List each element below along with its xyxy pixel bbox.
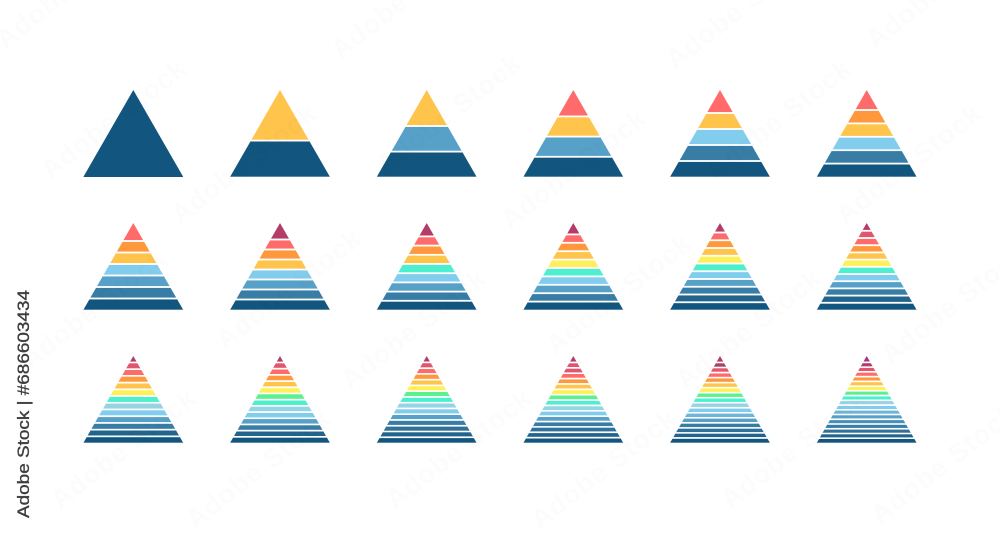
pyramid: 14 levels [230, 356, 330, 443]
pyramid: 11 levels [670, 223, 770, 310]
pyramid: 12 levels [817, 223, 917, 310]
pyramid: 1 level [83, 89, 183, 177]
row 1: pyramids with 1 to 6 levels [83, 89, 917, 177]
pyramid: 16 levels [523, 356, 623, 443]
pyramid: 3 levels [377, 90, 477, 177]
pyramid: 6 levels [817, 90, 917, 177]
pyramid: 7 levels [83, 223, 183, 310]
pyramid: 2 levels [230, 90, 330, 177]
row 2: pyramids with 7 to 12 levels [83, 223, 917, 310]
infographic canvas [16, 90, 916, 518]
pyramid: 13 levels [83, 356, 183, 443]
pyramid: 8 levels [230, 223, 330, 310]
pyramid: 18 levels [817, 356, 917, 443]
pyramid: 9 levels [377, 223, 477, 310]
pyramid: 4 levels [523, 90, 623, 177]
side credit text: Adobe Stock | #686603434 [14, 290, 33, 518]
pyramid: 17 levels [670, 356, 770, 443]
pyramid: 15 levels [377, 356, 477, 443]
row 3: pyramids with 13 to 18 levels [83, 356, 917, 443]
pyramid: 10 levels [523, 223, 623, 310]
pyramid: 5 levels [670, 90, 770, 177]
